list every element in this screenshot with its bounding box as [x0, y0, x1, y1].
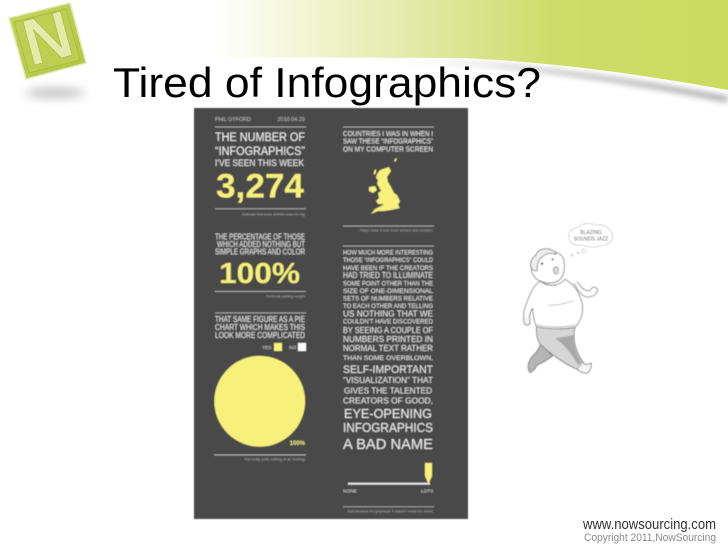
- footer: website and copyright: Copyright 2011,NowSourcing: [584, 532, 716, 544]
- header green swoosh: [0, 0, 728, 103]
- right column: long statement: THOSE “INFOGRAPHICS” COULD: [343, 257, 433, 264]
- left column: percentage: SIMPLE GRAPHS AND COLOR: [215, 248, 305, 256]
- left column: percentage: THE PERCENTAGE OF THOSE: [215, 232, 305, 242]
- left column: infographics count: I'VE SEEN THIS WEEK: [215, 158, 304, 168]
- right column: none-to-lots scale: [343, 463, 434, 514]
- left column: pie chart: 100%: [290, 441, 306, 447]
- right column: countries and UK map: ON MY COMPUTER SCREEN: [343, 146, 433, 154]
- right column: countries and UK map: SAW THESE “INFOGRAPHICS”: [343, 139, 434, 146]
- left column: pie chart: CHART WHICH MAKES THIS: [215, 323, 305, 332]
- thought bubble: [569, 224, 612, 256]
- title: Tired of Infographics?: [113, 59, 541, 106]
- logo: N block: [9, 0, 86, 98]
- footer: website and copyright: [582, 516, 716, 544]
- right column: long statement: BY SEEING A COUPLE OF: [343, 326, 433, 335]
- arms and hands: [524, 308, 533, 325]
- rear leg and foot: [528, 344, 553, 373]
- left column: pie chart: YES: [262, 345, 272, 351]
- trousers: [536, 327, 583, 369]
- sweater: [524, 279, 583, 329]
- left column: infographics count: PHIL GYFORD: [215, 117, 251, 123]
- right column: long statement: INFOGRAPHICS: [343, 420, 433, 435]
- left column: pie chart: [214, 315, 306, 462]
- right column: long statement: CREATORS OF GOOD,: [343, 396, 433, 406]
- right column: long statement: TO EACH OTHER AND TELLING: [343, 303, 433, 310]
- right column: long statement: THAN SOME OVERBLOWN,: [343, 355, 433, 362]
- right column: long statement: HAD TRIED TO ILLUMINATE: [343, 271, 433, 280]
- right column: long statement: [343, 246, 434, 453]
- right column: countries and UK map: COUNTRIES I WAS IN WHEN I: [343, 131, 433, 138]
- right column: none-to-lots scale: LOTS: [421, 488, 434, 494]
- walking man: [524, 249, 598, 373]
- right column: long statement: SIZE OF ONE-DIMENSIONAL: [343, 288, 433, 295]
- left column: infographics count: Estimate that looks definite when it's big: [242, 212, 305, 216]
- right column: long statement: EYE-OPENING: [344, 406, 432, 421]
- left column: infographics count: 3,274: [216, 168, 304, 206]
- left column: infographics count: [215, 117, 306, 216]
- right column: long statement: SETS OF NUMBERS RELATIVE: [343, 295, 433, 302]
- right column: long statement: COULDN'T HAVE DISCOVERED: [343, 319, 434, 325]
- panel: fake infographic poster: [194, 108, 468, 519]
- thought bubble: SOUNDS JAZZ: [574, 236, 608, 242]
- right column: long statement: A BAD NAME: [343, 436, 433, 453]
- thought bubble: BLAZING: [580, 230, 602, 236]
- right column: none-to-lots scale: Just because it's graphical, it doesn't mean it's useful: [347, 510, 433, 514]
- right column: long statement: US NOTHING THAT WE: [343, 308, 433, 318]
- left column: percentage: [215, 232, 306, 313]
- right column: long statement: HAVE BEEN IF THE CREATORS: [343, 265, 433, 272]
- right column: countries and UK map: Maps make it look more serious and complex: [360, 228, 433, 232]
- left column: percentage: 100%: [219, 258, 300, 290]
- right column: long statement: “VISUALIZATION” THAT: [343, 376, 433, 385]
- left column: percentage: WHICH ADDED NOTHING BUT: [217, 240, 305, 249]
- right column: long statement: NORMAL TEXT RATHER: [343, 344, 433, 353]
- right column: long statement: NUMBERS PRINTED IN: [343, 335, 433, 344]
- left column: pie chart: THAT SAME FIGURE AS A PIE: [215, 315, 305, 324]
- right column: none-to-lots scale: NONE: [343, 488, 357, 494]
- left column: infographics count: THE NUMBER OF: [215, 130, 305, 144]
- right column: long statement: SOME POINT OTHER THAN THE: [343, 280, 433, 288]
- left column: pie chart: This really adds nothing at all. Nothing: [244, 458, 305, 462]
- left column: pie chart: LOOK MORE COMPLICATED: [215, 331, 305, 340]
- left column: pie chart: NO: [289, 345, 296, 351]
- right column: countries and UK map: [343, 127, 434, 232]
- left column: percentage: Footnote adding weight: [266, 294, 306, 298]
- map: United Kingdom: [369, 158, 400, 214]
- right column: long statement: SELF-IMPORTANT: [343, 364, 433, 376]
- right column: long statement: HOW MUCH MORE INTERESTING: [343, 250, 433, 256]
- front foot: [577, 363, 591, 373]
- illustration: walking man with thought bubble: [524, 224, 612, 373]
- left column: infographics count: “INFOGRAPHICS”: [215, 144, 305, 158]
- right column: long statement: GIVES THE TALENTED: [344, 386, 432, 396]
- head: [531, 251, 564, 283]
- left column: infographics count: 2010.04.29: [277, 117, 305, 123]
